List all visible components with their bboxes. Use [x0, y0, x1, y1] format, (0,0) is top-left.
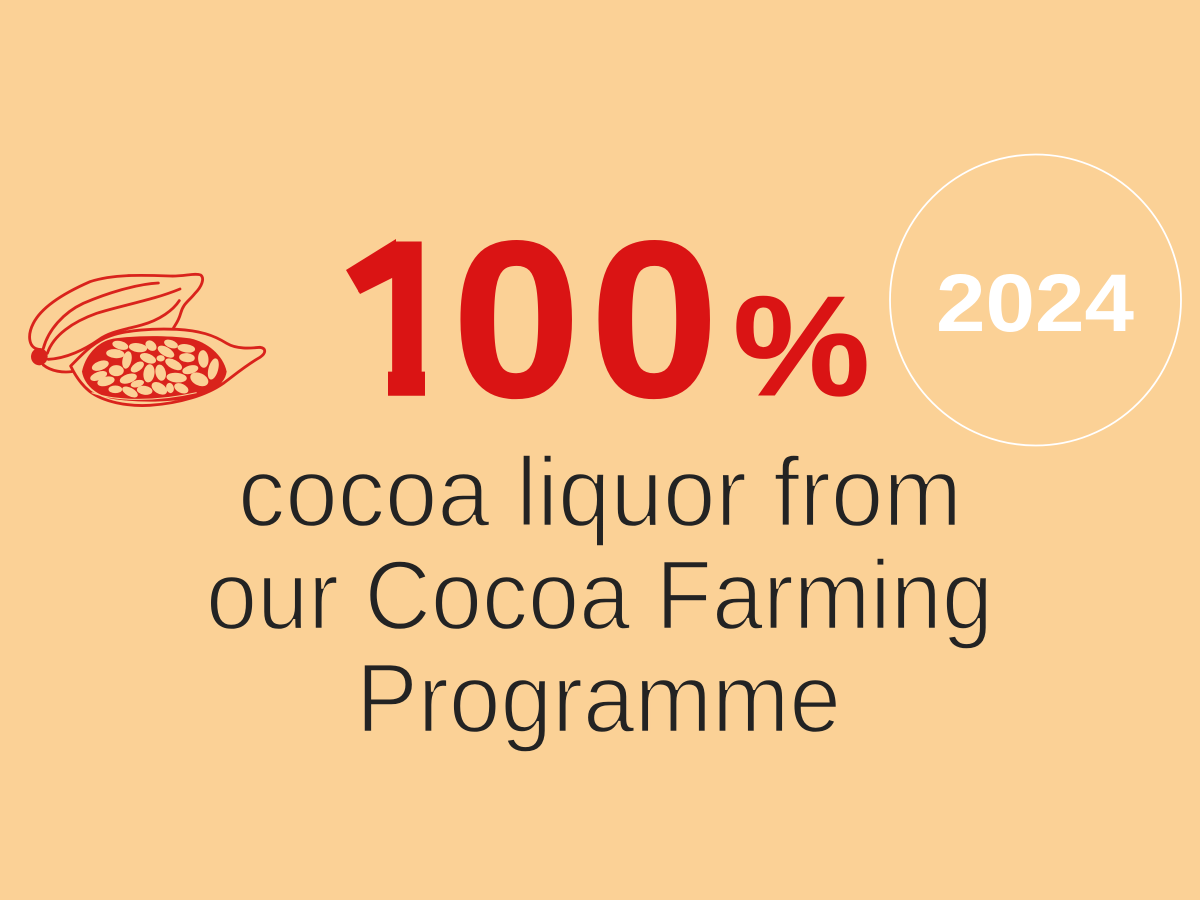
icon: cocoa pods — [30, 274, 265, 406]
description text: Programme — [356, 643, 841, 753]
year badge: 2024: 2024 — [936, 258, 1134, 349]
pod lower rim — [92, 393, 197, 399]
description text: our Cocoa Farming — [206, 540, 993, 650]
description text: cocoa liquor from — [238, 437, 962, 547]
headline number: 100%: 0 — [590, 196, 718, 444]
headline number: 100%: 1 — [345, 195, 459, 443]
description text — [206, 437, 993, 753]
year badge: 2024 — [890, 154, 1181, 446]
headline number: 100% — [335, 195, 870, 444]
pod interior — [82, 336, 227, 402]
pod tip — [31, 348, 48, 365]
cocoa seeds — [90, 339, 220, 399]
headline number: 100%: % — [733, 267, 870, 426]
headline number: 100%: 0 — [452, 196, 580, 444]
